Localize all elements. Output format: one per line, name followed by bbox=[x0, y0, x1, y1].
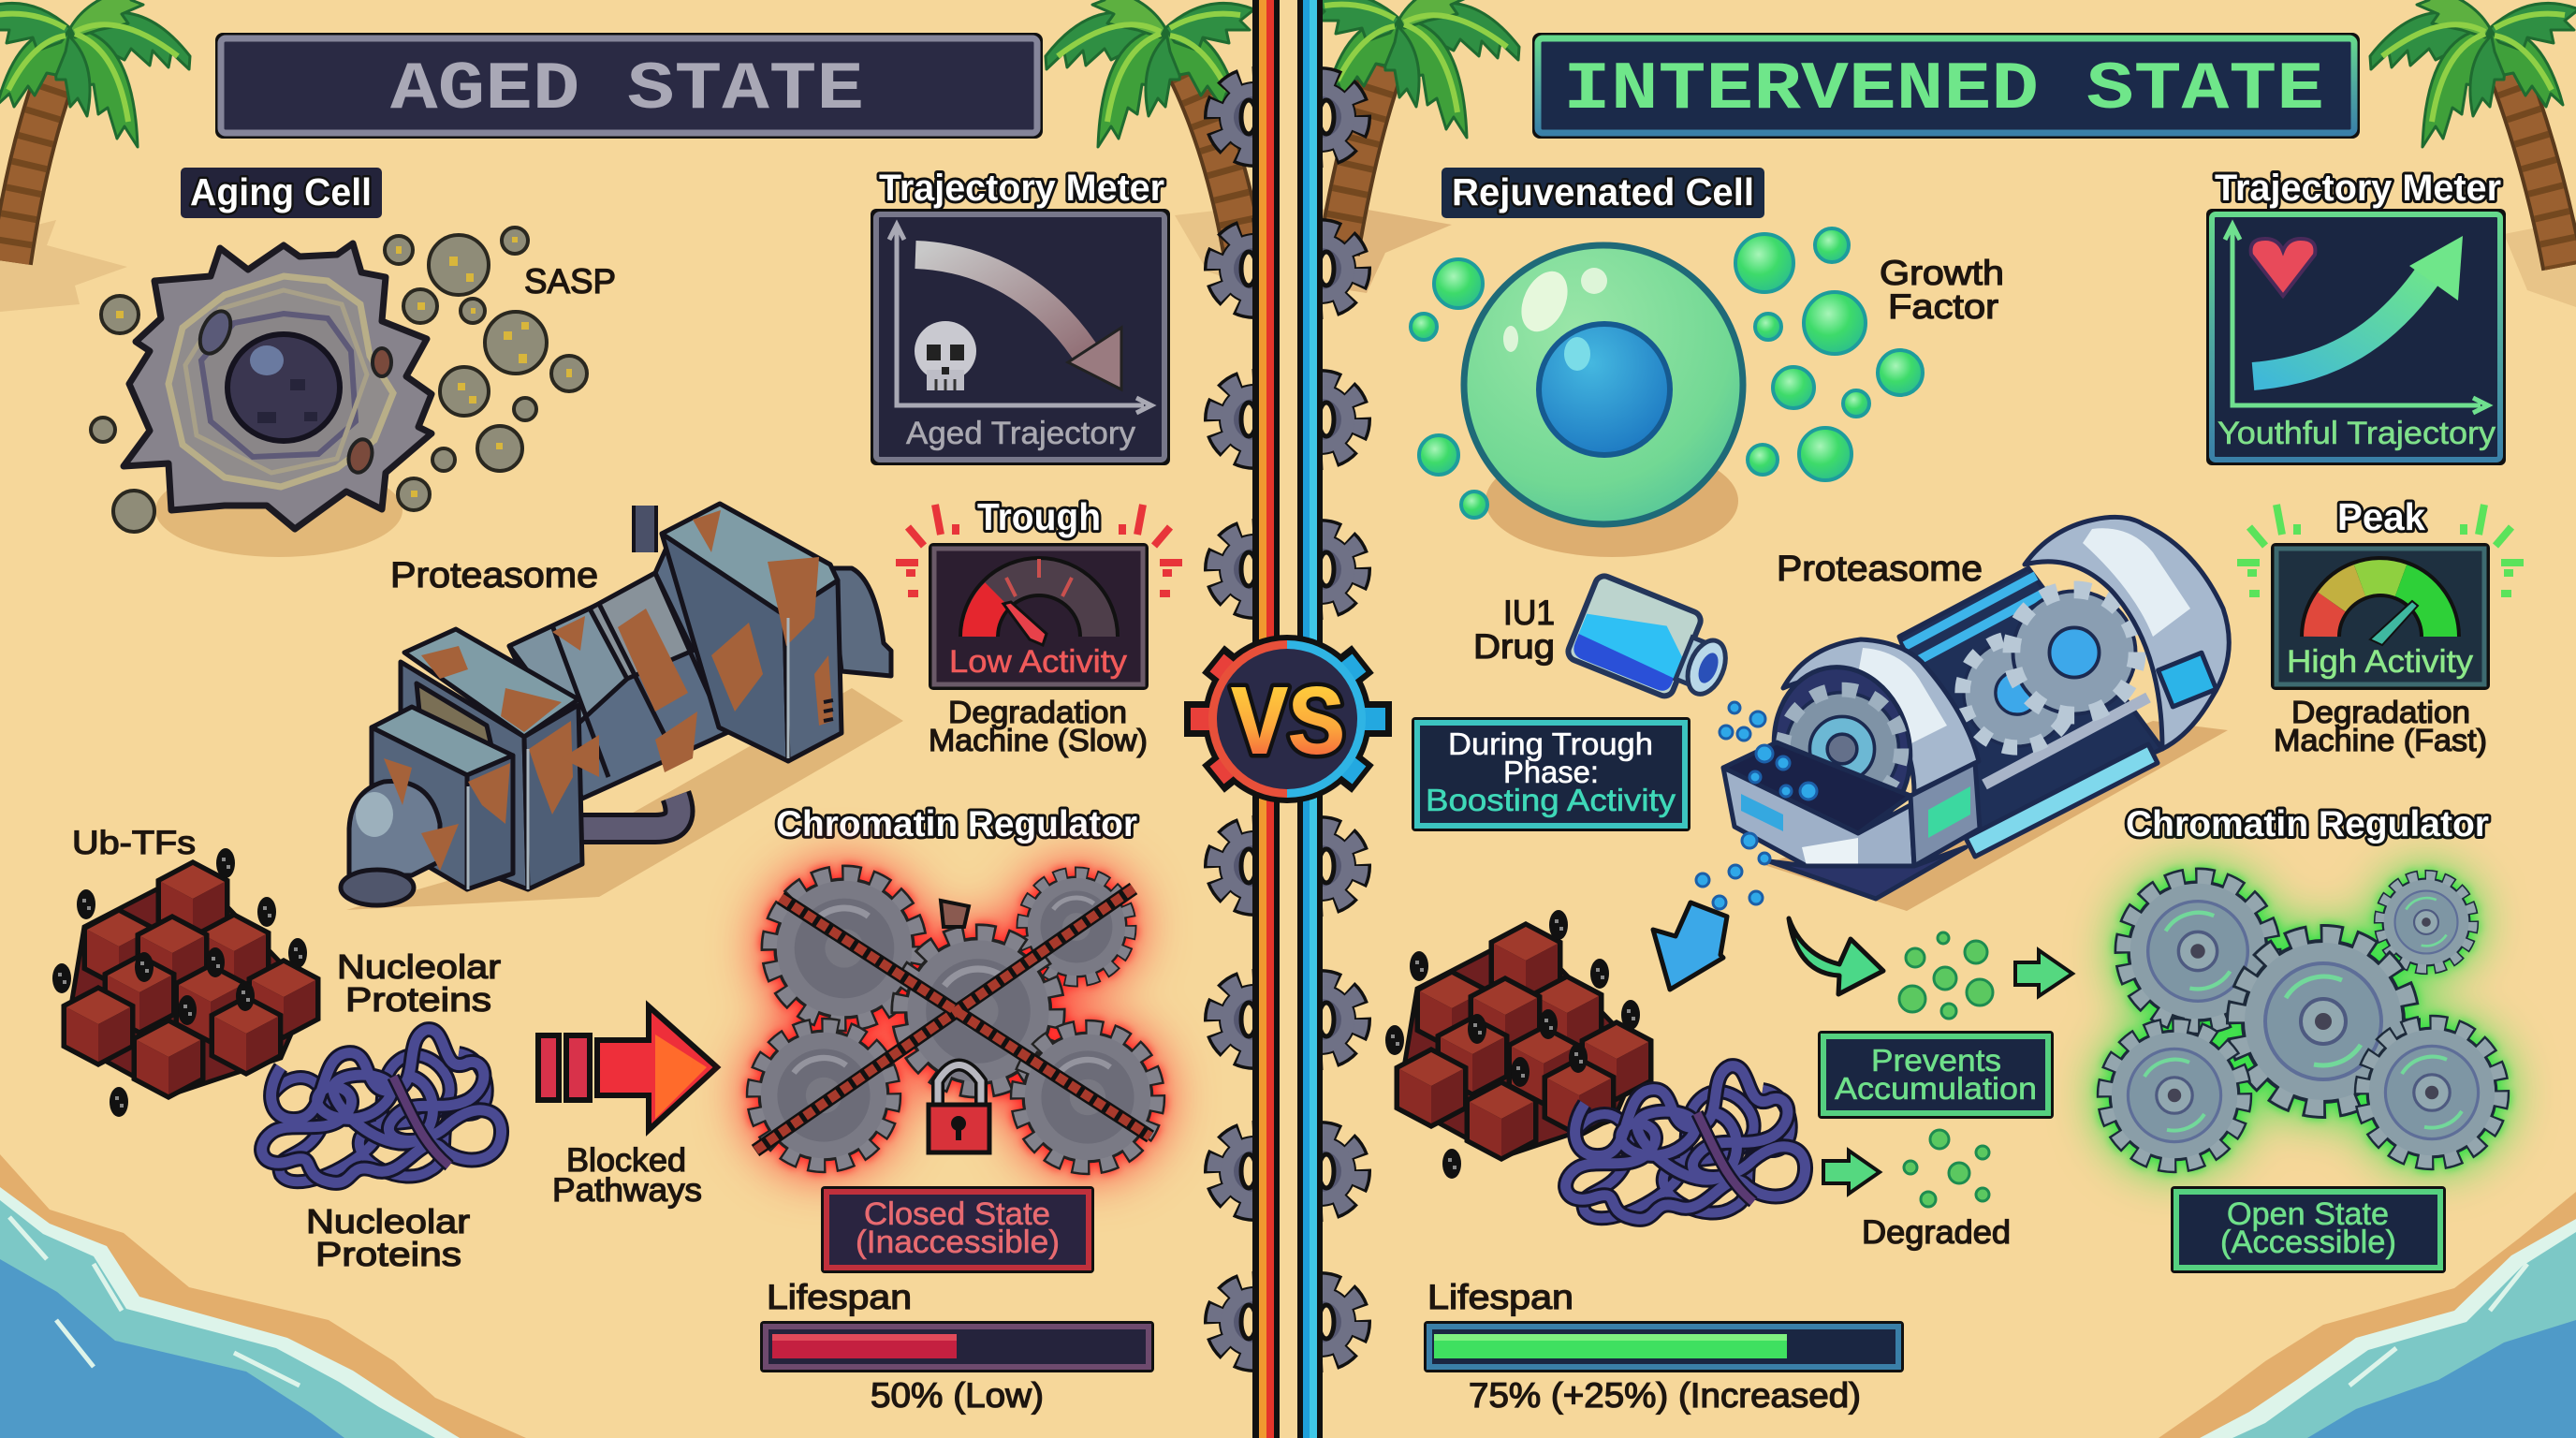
arrow: blue down-left bbox=[1653, 902, 1727, 990]
panel: high activity gauge bbox=[2271, 543, 2490, 690]
beach and water: bottom right bbox=[2159, 1192, 2576, 1438]
status box: prevents accumulation bbox=[1818, 1031, 2054, 1119]
caption: Aged Trajectory bbox=[906, 416, 1135, 451]
blue particles bbox=[1696, 702, 1817, 909]
status box: during trough phase: Boosting Activity bbox=[1426, 783, 1676, 817]
label: nucleolar proteins upper bbox=[337, 947, 501, 1019]
red glow gears bbox=[756, 874, 1155, 1165]
status box: open state: Open State bbox=[2227, 1196, 2389, 1232]
label: degradation machine (slow) bbox=[929, 695, 1148, 757]
tangled nucleolar proteins (intervened) bbox=[1566, 1066, 1806, 1219]
label: nucleolar proteins upper: Proteins bbox=[345, 980, 491, 1019]
palm tree: top left bbox=[0, 0, 190, 312]
panel: high activity gauge: High Activity bbox=[2287, 644, 2473, 680]
label: blocked pathways: Pathways bbox=[552, 1172, 702, 1209]
label: degradation machine (slow): Degradation bbox=[948, 695, 1127, 729]
status box: open state: (Accessible) bbox=[2220, 1225, 2396, 1260]
status box: during trough phase: Phase: bbox=[1503, 755, 1599, 789]
degraded green particles lower bbox=[1904, 1130, 1989, 1207]
label: blocked pathways: Blocked bbox=[566, 1142, 686, 1179]
ubiquitinated transcription factor cubes (aged) bbox=[52, 848, 317, 1117]
status box: prevents accumulation: Prevents bbox=[1871, 1043, 2001, 1078]
label: growth factor: Factor bbox=[1888, 287, 1998, 326]
divider: gears left bbox=[1215, 78, 1294, 1361]
title: aged state: AGED STATE bbox=[390, 51, 864, 128]
panel: aged trajectory meter bbox=[871, 209, 1170, 465]
palm tree: centre right bbox=[1288, 0, 1519, 293]
label: IU1 drug: Drug bbox=[1473, 627, 1555, 666]
caption: Youthful Trajectory bbox=[2217, 416, 2496, 451]
arrow: small green lower bbox=[1823, 1151, 1880, 1194]
icon: green rays bbox=[2237, 505, 2524, 594]
chromatin regulator: locked gears bbox=[755, 874, 1155, 1165]
chains bbox=[755, 888, 1150, 1151]
rejuvenated cell bbox=[1464, 245, 1743, 557]
panel: youthful trajectory meter bbox=[2206, 209, 2506, 465]
label: trajectory meter (aged): Trajectory Meter bbox=[879, 168, 1164, 209]
icon: heart bbox=[2251, 239, 2315, 296]
status box: closed state: Closed State bbox=[864, 1196, 1050, 1232]
label: SASP: SASP bbox=[524, 262, 616, 301]
arrow: small green upper bbox=[2015, 950, 2072, 996]
status box: during trough phase bbox=[1412, 717, 1690, 831]
divider: gear holes bbox=[1241, 100, 1334, 1339]
VS text: VS bbox=[1231, 670, 1345, 785]
lifespan bar: intervened: 75% (+25%) (Increased) bbox=[1469, 1376, 1861, 1415]
label: growth factor bbox=[1880, 254, 2004, 326]
rising trajectory arrow bbox=[2253, 236, 2463, 376]
ubiquitinated cubes (intervened) bbox=[1385, 910, 1650, 1179]
status box: closed state: (Inaccessible) bbox=[856, 1225, 1060, 1260]
label: proteasome (aged): Proteasome bbox=[390, 556, 598, 595]
label: aging cell: Aging Cell bbox=[190, 170, 372, 213]
rusty proteasome machine bbox=[341, 504, 903, 910]
palm tree: top right bbox=[2370, 0, 2576, 307]
lifespan bar: intervened: Lifespan bbox=[1427, 1278, 1573, 1316]
status box: open state bbox=[2171, 1186, 2446, 1273]
label: IU1 drug bbox=[1473, 594, 1555, 666]
label: peak: Peak bbox=[2337, 495, 2425, 538]
lifespan bar: intervened bbox=[1424, 1278, 1904, 1415]
lifespan bar: aged bbox=[760, 1278, 1154, 1415]
label: rejuvenated cell: Rejuvenated Cell bbox=[1452, 170, 1754, 213]
label: nucleolar proteins lower: Nucleolar bbox=[306, 1202, 470, 1240]
beach and water: bottom left bbox=[0, 1154, 526, 1438]
label: nucleolar proteins lower bbox=[306, 1202, 470, 1273]
tangled nucleolar proteins (aged) bbox=[262, 1030, 502, 1182]
SASP particles bbox=[91, 227, 587, 532]
chromatin regulator: open gears bbox=[2107, 876, 2499, 1163]
icon: skull bbox=[915, 321, 976, 390]
label: growth factor: Growth bbox=[1880, 254, 2004, 292]
icon: red alarm rays bbox=[896, 505, 1182, 594]
lifespan bar: aged: 50% (Low) bbox=[871, 1376, 1044, 1415]
arrow: blocked pathways bbox=[538, 1006, 717, 1130]
label: degradation machine (slow): Machine (Slow) bbox=[929, 723, 1148, 757]
label: degradation machine (fast): Degradation bbox=[2291, 695, 2470, 729]
label: chromatin regulator (intervened): Chromatin Regulator bbox=[2126, 804, 2489, 844]
panel: low activity gauge: Low Activity bbox=[949, 644, 1127, 680]
degraded green particles upper bbox=[1899, 932, 1993, 1019]
axes bbox=[889, 225, 1151, 413]
futuristic proteasome machine bbox=[1723, 517, 2229, 911]
aging cell bbox=[124, 243, 432, 557]
label: proteasome (intervened): Proteasome bbox=[1777, 550, 1983, 589]
label: degradation machine (fast) bbox=[2274, 695, 2487, 757]
label: chromatin regulator (aged): Chromatin Regulator bbox=[776, 804, 1137, 844]
status box: during trough phase: During Trough bbox=[1448, 726, 1653, 761]
status box: prevents accumulation: Accumulation bbox=[1835, 1071, 2037, 1106]
label: nucleolar proteins lower: Proteins bbox=[315, 1235, 461, 1273]
label: blocked pathways bbox=[552, 1142, 702, 1209]
divider: central rails bbox=[1252, 0, 1323, 1438]
lifespan bar: aged: Lifespan bbox=[767, 1278, 912, 1316]
broken chain link bbox=[941, 901, 969, 927]
divider: gears right bbox=[1281, 78, 1360, 1361]
title: intervened state: INTERVENED STATE bbox=[1563, 51, 2324, 128]
label: nucleolar proteins upper: Nucleolar bbox=[337, 947, 501, 986]
panel: low activity gauge bbox=[929, 543, 1149, 690]
icon: IU1 drug vial bbox=[1565, 573, 1740, 713]
axes bbox=[2225, 225, 2488, 413]
label: trough: Trough bbox=[977, 495, 1101, 538]
title: aged state bbox=[215, 33, 1043, 139]
padlock bbox=[929, 1065, 989, 1152]
label: IU1 drug: IU1 bbox=[1503, 594, 1555, 632]
growth factor particles bbox=[1411, 228, 1923, 518]
falling trajectory arrow bbox=[915, 255, 1121, 389]
arrow: green curved bbox=[1789, 918, 1883, 994]
status box: closed state bbox=[821, 1186, 1094, 1273]
label: degraded: Degraded bbox=[1862, 1214, 2011, 1251]
palm tree: centre left bbox=[1046, 0, 1256, 288]
VS gear badge bbox=[1184, 635, 1392, 803]
label: degradation machine (fast): Machine (Fast) bbox=[2274, 723, 2487, 757]
label: ub-TFs: Ub-TFs bbox=[72, 825, 196, 861]
label: trajectory meter (intervened): Trajectory Meter bbox=[2215, 168, 2501, 209]
title: intervened state bbox=[1532, 33, 2360, 139]
